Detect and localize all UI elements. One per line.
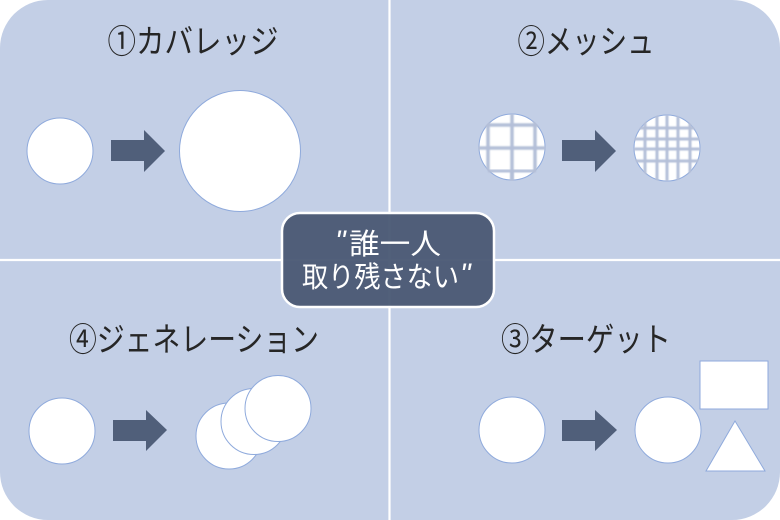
- fine mesh circle: [634, 115, 700, 181]
- single circle: [29, 398, 95, 464]
- heading: mesh: ②メッシュ: [518, 23, 654, 60]
- panel: generation: [29, 321, 319, 469]
- coarse mesh circle: [478, 114, 546, 181]
- panel: mesh: [478, 23, 700, 181]
- heading: coverage: ①カバレッジ: [108, 23, 278, 60]
- arrow: [111, 130, 165, 172]
- rectangle: [700, 361, 768, 409]
- overlapping circles: [196, 376, 311, 469]
- center callout: 誰一人: [349, 228, 441, 261]
- center callout: 取り残さない: [302, 261, 459, 294]
- arrow: [562, 130, 616, 172]
- center callout: ": [335, 225, 347, 258]
- source circle: [479, 397, 545, 463]
- panel: coverage: [27, 23, 300, 212]
- panel: target: [479, 321, 768, 471]
- arrow: [562, 410, 617, 451]
- large circle: [180, 90, 300, 212]
- small circle: [27, 118, 93, 184]
- heading: generation: ④ジェネレーション: [69, 321, 319, 358]
- heading: target: ③ターゲット: [501, 321, 671, 358]
- center callout: [282, 213, 494, 307]
- center callout: ": [460, 258, 472, 291]
- triangle: [706, 421, 765, 471]
- target circle: [635, 397, 701, 463]
- arrow: [113, 410, 167, 451]
